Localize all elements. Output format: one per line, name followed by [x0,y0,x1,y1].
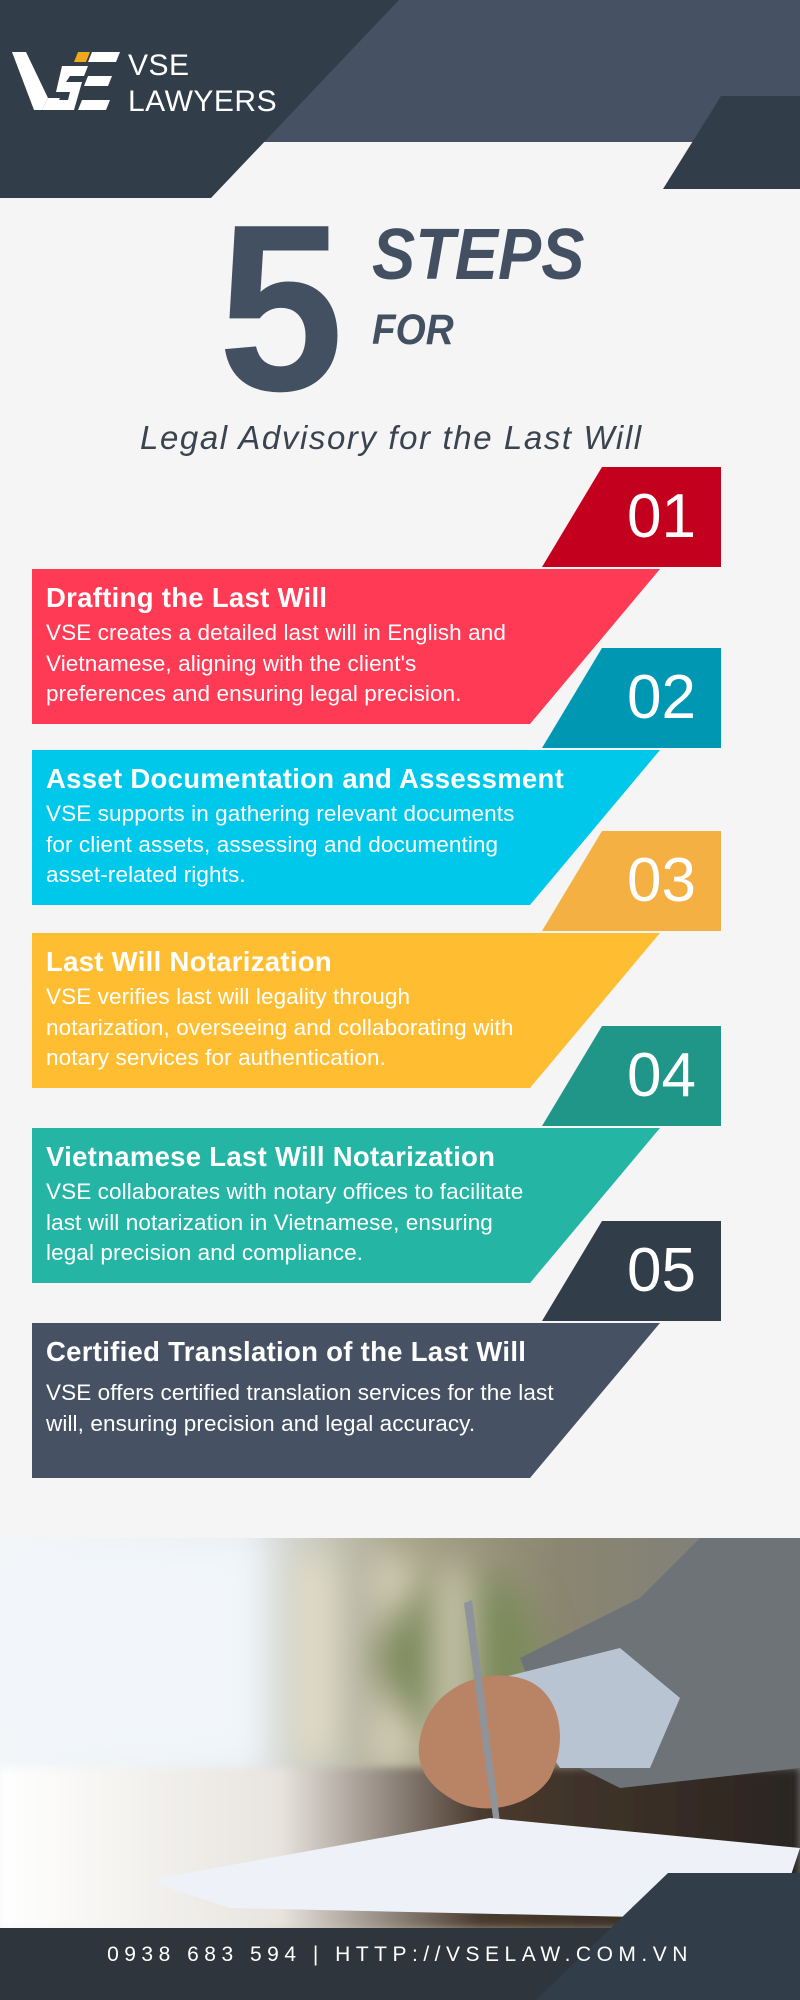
number 02: 02 [627,663,696,732]
step 2 text: asset-related rights. [46,862,246,887]
step 1 text: Vietnamese, aligning with the client's [46,650,416,676]
step 1 text: preferences and ensuring legal precision. [46,681,462,706]
header background [0,0,800,198]
panel: step 4 [46,1141,523,1265]
step 4 title: Vietnamese Last Will Notarization [46,1141,495,1172]
number 01: 01 [627,482,696,551]
step 2 text [46,801,514,887]
footer [0,1873,800,2000]
step 3 text: notary services for authentication. [46,1045,386,1070]
step 3 text [46,984,514,1070]
step 2 text: VSE supports in gathering relevant documents [46,801,514,826]
panel: step 3 [46,946,514,1070]
panel: step 5 [46,1336,554,1436]
heading STEPS: STEPS [372,215,584,295]
step 4 text: legal precision and compliance. [46,1240,363,1265]
panel: step 1 [46,582,506,706]
panel: step 2 [46,763,564,887]
logo text [128,49,277,118]
logo [12,49,277,118]
photo: hand signing document [4,1538,800,1928]
logo text: VSE [128,49,190,82]
number 03: 03 [627,846,696,915]
step 5 title: Certified Translation of the Last Will [46,1336,526,1367]
heading FOR: FOR [372,306,454,354]
subtitle: Legal Advisory for the Last Will [140,419,643,456]
step 4 text: last will notarization in Vietnamese, ensuring [46,1210,493,1234]
step 4 text: VSE collaborates with notary offices to facilitate [46,1179,523,1204]
step 1 text [46,620,506,706]
step 2 title: Asset Documentation and Assessment [46,763,564,794]
step 3 text: notarization, overseeing and collaborating with [46,1014,514,1040]
step 3 text: VSE verifies last will legality through [46,984,410,1009]
big number 5: 5 [218,176,344,441]
step 4 text [46,1179,523,1265]
step 2 text: for client assets, assessing and documenting [46,832,498,856]
footer contact text: 0938 683 594 | HTTP://VSELAW.COM.VN [107,1943,693,1966]
step 5 text: VSE offers certified translation services for the last [46,1380,554,1405]
icon: VSE mark [12,52,120,110]
step shapes [32,467,721,1478]
step 5 text: will, ensuring precision and legal accuracy. [46,1410,475,1436]
logo text: LAWYERS [128,85,277,118]
step 5 text [46,1380,554,1436]
step 3 title: Last Will Notarization [46,946,332,977]
number 05: 05 [627,1236,696,1305]
step 1 title: Drafting the Last Will [46,582,327,613]
step 1 text: VSE creates a detailed last will in English and [46,620,506,645]
number 04: 04 [627,1041,696,1110]
